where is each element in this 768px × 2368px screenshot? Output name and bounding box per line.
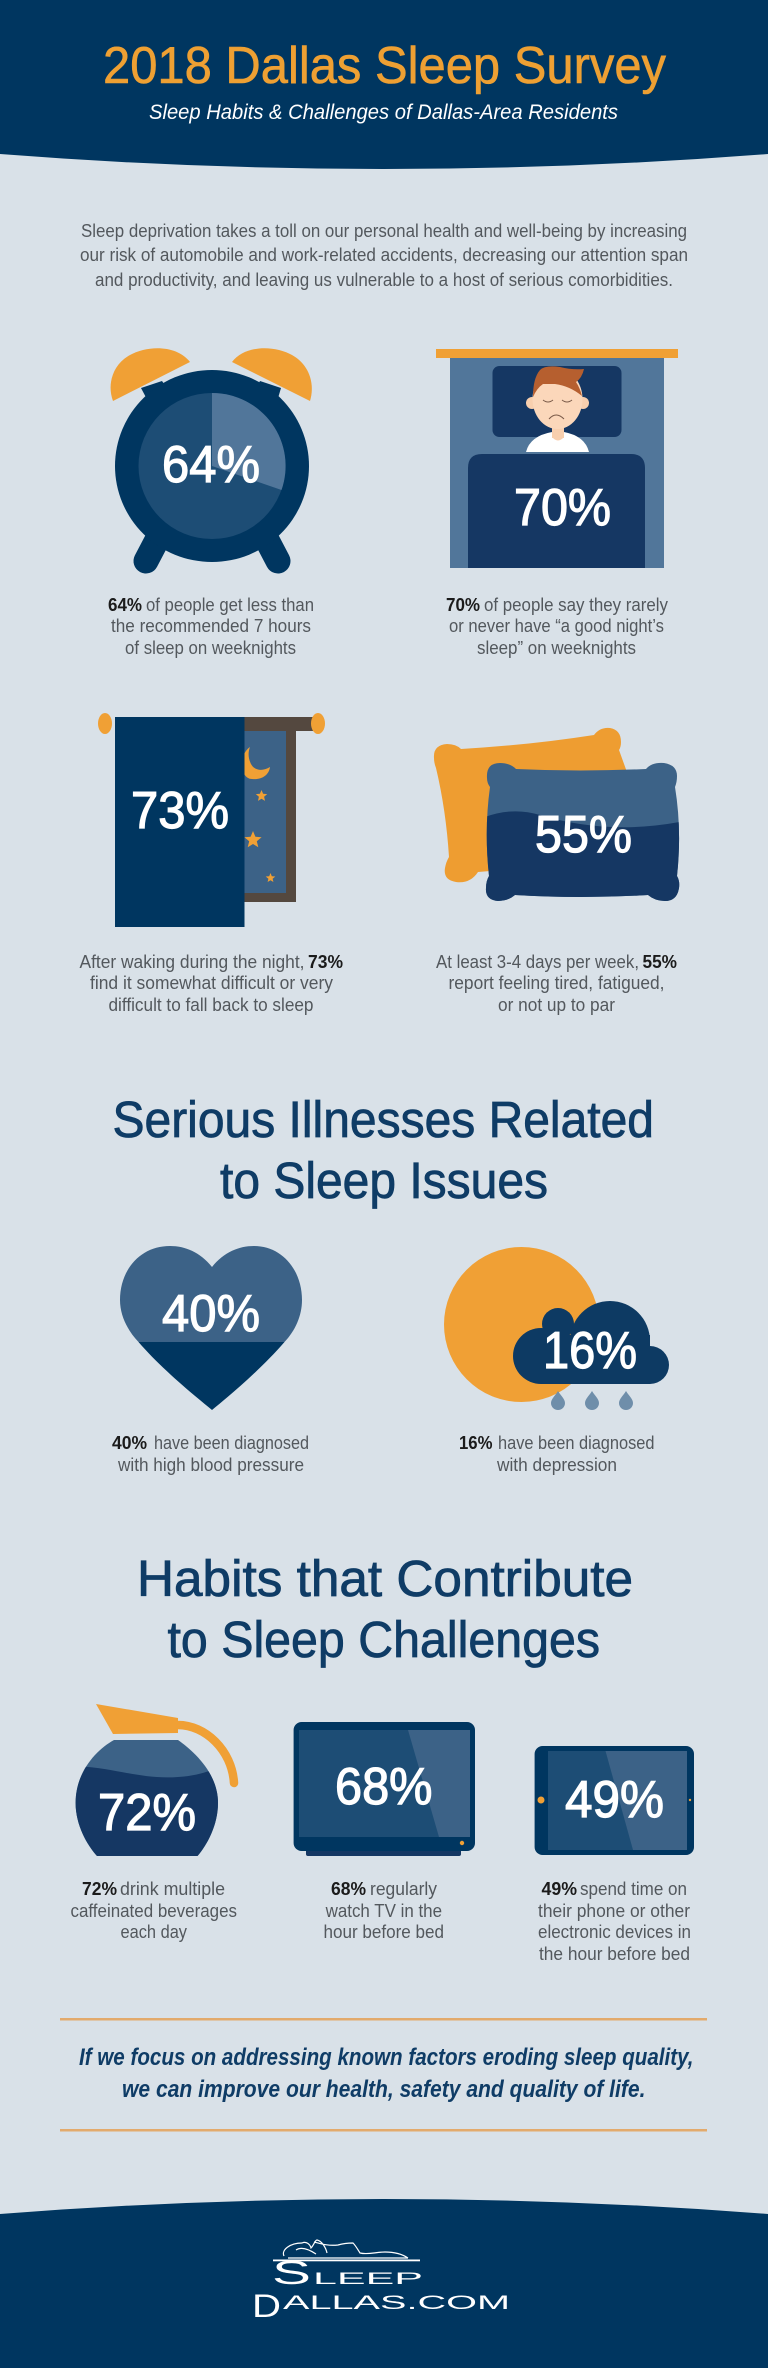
caption: 55%: report feeling tired, fatigued, [448, 973, 664, 993]
caption: 72%: 72% [82, 1879, 117, 1899]
caption: 64%: the recommended 7 hours [111, 616, 311, 636]
caption: 68%: watch TV in the [325, 1901, 442, 1921]
caption: 16%: have been diagnosed [498, 1433, 654, 1453]
intro paragraph [80, 221, 688, 290]
heading: serious illnesses [112, 1091, 654, 1209]
caption: 40%: 40% [112, 1433, 147, 1453]
stat: 55%: 55% [535, 806, 632, 864]
stat: 70%: 70% [514, 479, 611, 537]
caption: 16%: 16% [459, 1433, 492, 1453]
icon: alarm clock [111, 348, 312, 562]
caption: 55% [436, 952, 677, 1015]
stat: 16%: 16% [543, 1322, 637, 1380]
caption: 49%: the hour before bed [539, 1944, 690, 1964]
panel: 70% sleeper in bed [436, 349, 678, 658]
logo: Sleep Dallas.com: D [252, 2288, 281, 2324]
caption: 70%: or never have “a good night’s [449, 616, 664, 636]
caption: 55%: 55% [642, 952, 677, 972]
icon: television [294, 1722, 475, 1856]
logo: Sleep Dallas.com [252, 2240, 510, 2324]
icon: curtained window at night [98, 713, 325, 927]
intro paragraph: and productivity, and leaving us vulnerable to a host of serious comorbidities. [95, 270, 673, 290]
heading: habits: Habits that Contribute [137, 1550, 633, 1607]
header banner [0, 0, 768, 169]
caption: 16%: with depression [496, 1455, 617, 1475]
caption: 64%: 64% [108, 595, 142, 615]
caption: 64% [108, 595, 314, 658]
callout: closing message [60, 2018, 707, 2132]
caption: 73% [80, 952, 343, 1015]
title: 2018 Dallas Sleep Survey [103, 37, 666, 95]
panel: 64% alarm clock [108, 348, 314, 658]
panel: 72% coffee pot [70, 1704, 237, 1942]
heading: serious illnesses: to Sleep Issues [220, 1152, 548, 1209]
heading: habits [137, 1550, 633, 1668]
icon: tablet [535, 1746, 694, 1855]
caption: 40%: with high blood pressure [117, 1455, 304, 1475]
intro paragraph: our risk of automobile and work-related accidents, decreasing our attention span [80, 245, 688, 265]
caption: 16% [459, 1433, 654, 1475]
heading: habits: to Sleep Challenges [168, 1611, 600, 1668]
caption: 40% [112, 1433, 309, 1475]
caption: 70% [446, 595, 668, 658]
stat: 68%: 68% [335, 1758, 432, 1816]
panel: 40% heart [112, 1240, 309, 1475]
subtitle: Sleep Habits & Challenges of Dallas-Area Residents [149, 100, 618, 124]
caption: 70%: of people say they rarely [484, 595, 668, 615]
panel: 55% pillows [434, 728, 685, 1015]
callout: closing message: we can improve our health, safety and quality of life. [122, 2076, 646, 2103]
caption: 64%: of people get less than [146, 595, 314, 615]
panel: 73% window and curtain [80, 713, 343, 1015]
caption: 68%: hour before bed [324, 1922, 444, 1942]
caption: 73%: difficult to fall back to sleep [108, 995, 314, 1015]
caption: 68%: regularly [370, 1879, 437, 1899]
logo: Sleep Dallas.com: LEEP [313, 2269, 423, 2288]
stat: 72%: 72% [98, 1784, 196, 1842]
caption: 72%: drink multiple [120, 1879, 225, 1899]
intro paragraph: Sleep deprivation takes a toll on our personal health and well-being by increasing [81, 221, 687, 241]
icon: coffee pot [70, 1704, 234, 1860]
icon: sun behind rain cloud [444, 1247, 669, 1410]
caption: 73%: 73% [308, 952, 343, 972]
stat: 64%: 64% [162, 436, 260, 494]
caption: 49% [538, 1879, 691, 1964]
caption: 68% [324, 1879, 444, 1942]
caption: 72%: caffeinated beverages [70, 1901, 237, 1921]
caption: 55%: or not up to par [498, 995, 615, 1015]
icon: person in bed [436, 349, 678, 568]
caption: 70%: sleep” on weeknights [477, 638, 636, 658]
heading: serious illnesses: Serious Illnesses Related [112, 1091, 654, 1148]
icon: pillows [434, 728, 685, 905]
caption: 73%: find it somewhat difficult or very [90, 973, 333, 993]
caption: 49%: 49% [542, 1879, 577, 1899]
caption: 64%: of sleep on weeknights [125, 638, 296, 658]
caption: 73%: After waking during the night, [80, 952, 304, 972]
caption: 72% [70, 1879, 237, 1942]
panel: 16% sun and rain cloud [444, 1247, 669, 1475]
stat: 49%: 49% [565, 1771, 664, 1829]
caption: 40%: have been diagnosed [154, 1433, 309, 1453]
caption: 49%: electronic devices in [538, 1922, 691, 1942]
icon: heart [120, 1246, 302, 1410]
footer banner [0, 2199, 768, 2368]
logo: Sleep Dallas.com: ALLAS.COM [283, 2292, 510, 2314]
stat: 73%: 73% [131, 782, 229, 840]
caption: 49%: spend time on [580, 1879, 687, 1899]
panel: 68% television [294, 1722, 475, 1942]
caption: 49%: their phone or other [538, 1901, 690, 1921]
caption: 68%: 68% [331, 1879, 366, 1899]
caption: 70%: 70% [446, 595, 480, 615]
caption: 72%: each day [120, 1922, 187, 1942]
stat: 40%: 40% [162, 1285, 260, 1343]
panel: 49% tablet [535, 1746, 694, 1964]
caption: 55%: At least 3-4 days per week, [436, 952, 639, 972]
logo: Sleep Dallas.com: S [272, 2254, 311, 2291]
